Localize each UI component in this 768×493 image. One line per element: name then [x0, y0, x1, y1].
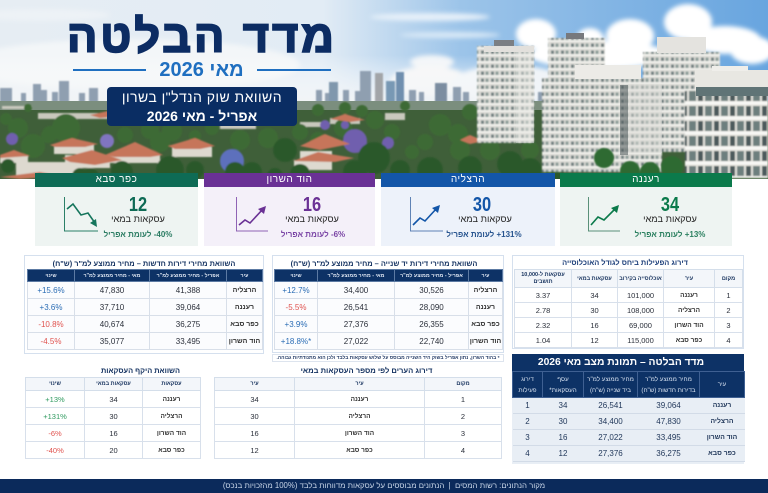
- footnote: * בהוד השרון, נתון אפריל בשוק היד השנייה מבוסס על שלוש עסקאות בלבד ולכן הוא מתנודתיות גבוהה.: [276, 356, 500, 361]
- table: activity per population: 115,000: [627, 336, 654, 344]
- table: new apartment prices: הרצליה: [233, 286, 256, 294]
- tower left: [477, 46, 534, 143]
- tower rear right: [643, 52, 720, 152]
- table: May 2026 summary: 4: [525, 449, 530, 458]
- table: ranking by deals: 30: [250, 412, 259, 420]
- table: May 2026 summary: פעילות: [518, 386, 537, 394]
- table: May 2026 summary: 27,376: [598, 449, 623, 458]
- table: ranking by deals: 16: [250, 428, 259, 438]
- card: Herzliya: [381, 173, 555, 246]
- table: activity per population: 3.37: [536, 290, 550, 300]
- table: activity per population: אוכלוסייה בקירוב: [619, 276, 662, 282]
- table: second-hand apartment prices: +12.7%: [282, 286, 310, 294]
- table: activity per population: 16: [590, 320, 599, 330]
- table: ranking by deals: הרצליה: [348, 412, 371, 420]
- deals label: עסקאות במאי: [643, 214, 697, 224]
- table: activity per population: רעננה: [680, 292, 698, 298]
- table: May 2026 summary: ביד שנייה (ש"ח): [590, 386, 631, 394]
- card: Kfar Saba: [35, 173, 198, 246]
- table: May 2026 summary: 47,830: [656, 417, 681, 426]
- table: ranking by deals: מקום: [456, 381, 470, 387]
- table: new apartment prices: 40,674: [100, 320, 124, 328]
- panel heading: דירוג הערים לפי מספר העסקאות במאי: [301, 366, 432, 375]
- table: second-hand apartment prices: +18.8%*: [281, 336, 311, 346]
- table: deal volume comparison: עסקאות: [161, 381, 182, 387]
- table: deal volume comparison: עסקאות במאי: [96, 381, 131, 387]
- footer: data source: [0, 479, 768, 493]
- table: second-hand apartment prices: 30,526: [419, 286, 444, 294]
- table: May 2026 summary: 34: [559, 401, 567, 410]
- subtitle box: [107, 87, 297, 126]
- table: new apartment prices: +3.6%: [40, 302, 62, 312]
- table: May 2026 summary: דירוג: [521, 376, 534, 382]
- table: May 2026 summary: רעננה: [713, 402, 731, 409]
- table: activity per population: הרצליה: [678, 306, 700, 314]
- table: second-hand apartment prices: 28,090: [419, 302, 444, 312]
- table: activity per population: כפר סבא: [676, 336, 702, 344]
- table: ranking by deals: רעננה: [351, 396, 368, 402]
- table: new apartment prices: כפר סבא: [230, 320, 259, 328]
- card: Hod Hasharon: [204, 173, 375, 246]
- table: new apartment prices: עיר: [241, 272, 248, 278]
- panel: deal volume comparison: [25, 366, 201, 459]
- table: May 2026 summary: הרצליה: [710, 418, 734, 425]
- panel heading: מדד הבלטה – תמונת מצב מאי 2026: [538, 357, 704, 368]
- table: activity per population: מקום: [722, 276, 735, 282]
- table: second-hand apartment prices: 22,740: [419, 336, 444, 346]
- panel: new apartment prices: [24, 255, 264, 354]
- table: ranking by deals: כפר סבא: [346, 446, 373, 454]
- card heading: רעננה: [632, 174, 660, 185]
- table: second-hand apartment prices: 34,400: [344, 286, 368, 294]
- hero photo: city skyline and residential towers: [0, 0, 768, 179]
- table: deal volume comparison: 20: [109, 446, 118, 454]
- panel heading: השוואת היקף העסקאות: [101, 366, 180, 375]
- table: ranking by deals: 2: [461, 412, 465, 420]
- icon: falling chart: [64, 197, 98, 232]
- table: activity per population: 69,000: [629, 320, 652, 330]
- table: deal volume comparison: [25, 377, 201, 459]
- table: ranking by deals: 1: [461, 394, 465, 404]
- icon: rising chart: [410, 197, 443, 232]
- table: second-hand apartment prices: 27,022: [344, 336, 368, 346]
- deals number: 30: [473, 194, 491, 216]
- houses: [0, 145, 332, 175]
- table: ranking by deals: עיר: [250, 381, 259, 387]
- title: מדד הבלטה: [67, 11, 337, 62]
- change versus April: -40% לעומת אפריל: [104, 230, 172, 239]
- table: activity per population: 2.32: [536, 320, 550, 330]
- table: May 2026 summary: 26,541: [598, 401, 623, 410]
- table: new apartment prices: שינוי: [45, 272, 57, 278]
- table: second-hand apartment prices: מאי - מחיר ממוצע למ"ר: [327, 272, 385, 278]
- table: new apartment prices: +15.6%: [37, 286, 65, 294]
- table: May 2026 summary: מחיר ממוצע למ"ר: [645, 376, 692, 382]
- table: activity per population: 12: [590, 336, 599, 344]
- card heading: הרצליה: [451, 174, 485, 185]
- table: May 2026 summary: הוד השרון: [707, 434, 737, 441]
- table: deal volume comparison: הוד השרון: [157, 430, 186, 436]
- table: deal volume comparison: +131%: [43, 412, 67, 420]
- table: second-hand apartment prices: [274, 269, 503, 350]
- table: activity per population: 101,000: [627, 290, 654, 300]
- tower right foreground: [685, 90, 768, 178]
- table: May 2026 summary: כפר סבא: [708, 450, 736, 457]
- table: new apartment prices: 39,064: [176, 302, 200, 312]
- table: activity per population: 2: [726, 306, 731, 314]
- table: new apartment prices: 33,495: [176, 336, 200, 346]
- table: second-hand apartment prices: 26,355: [419, 320, 444, 328]
- table: May 2026 summary: 34,400: [598, 417, 623, 426]
- table: ranking by deals: הוד השרון: [345, 430, 374, 436]
- panel: ranking by deals: [214, 366, 502, 459]
- table: May 2026 summary: 27,022: [598, 433, 623, 442]
- table: new apartment prices: 47,830: [100, 286, 124, 294]
- panel: activity per population: [512, 255, 744, 349]
- table: ranking by deals: 4: [461, 446, 465, 454]
- subtitle box: אפריל - מאי 2026: [147, 108, 257, 124]
- table: activity per population: [514, 269, 743, 348]
- panel heading: [512, 354, 744, 371]
- table: May 2026 summary: 3: [525, 433, 530, 442]
- table: deal volume comparison: הרצליה: [160, 412, 183, 420]
- table: second-hand apartment prices: הרצליה: [474, 286, 497, 294]
- table: new apartment prices: 37,710: [100, 302, 124, 312]
- deals label: עסקאות במאי: [458, 214, 512, 224]
- table: second-hand apartment prices: כפר סבא: [471, 320, 500, 328]
- table: May 2026 summary: 12: [559, 449, 567, 458]
- table: activity per population: 34: [590, 290, 599, 300]
- table: May 2026 summary: [512, 371, 745, 462]
- table: second-hand apartment prices: הוד השרון: [470, 338, 501, 344]
- table: May 2026 summary: מחיר ממוצע למ"ר: [587, 376, 634, 382]
- table: activity per population: 1.04: [536, 336, 550, 344]
- footer: data source: מקור הנתונים: רשות המסים | הנתונים מבוססים על עסקאות מדווחות בלבד (100% מהזכויות בנכס): [223, 481, 545, 490]
- table: activity per population: 30: [590, 306, 599, 314]
- ground neighbourhood: [0, 101, 768, 179]
- card heading: [381, 173, 555, 186]
- table: activity per population: 1: [726, 290, 731, 300]
- table: deal volume comparison: שינוי: [49, 381, 61, 387]
- table: May 2026 summary: בדירות חדשות (ש"ח): [641, 386, 696, 394]
- subtitle: month and year with rules: מאי 2026: [159, 59, 244, 81]
- table: activity per population: עסקאות במאי: [577, 276, 612, 282]
- table: May 2026 summary: 33,495: [656, 433, 681, 442]
- table: ranking by deals: עיר: [355, 381, 364, 387]
- table: new apartment prices: 41,388: [176, 286, 200, 294]
- deals number: 12: [129, 194, 147, 216]
- table: second-hand apartment prices: -5.5%: [286, 302, 306, 312]
- panel heading: דירוג הפעילות ביחס לגודל האוכלוסייה: [562, 258, 688, 267]
- subtitle box: השוואת שוק הנדל"ן בשרון: [122, 88, 282, 104]
- table: activity per population: 2.78: [536, 306, 550, 314]
- deals label: עסקאות במאי: [285, 214, 339, 224]
- table: May 2026 summary: 36,275: [656, 449, 681, 458]
- table: ranking by deals: [214, 377, 502, 459]
- card heading: כפר סבא: [96, 174, 137, 185]
- table: deal volume comparison: -6%: [48, 428, 62, 438]
- footnote: [272, 354, 504, 362]
- table: May 2026 summary: 16: [559, 433, 567, 442]
- table: new apartment prices: רעננה: [235, 304, 254, 310]
- table: new apartment prices: הוד השרון: [229, 338, 260, 344]
- table: new apartment prices: [27, 269, 263, 350]
- icon: rising chart: [236, 197, 268, 232]
- table: second-hand apartment prices: עיר: [482, 272, 489, 278]
- table: second-hand apartment prices: רעננה: [476, 304, 495, 310]
- table: second-hand apartment prices: 27,376: [344, 320, 368, 328]
- table: activity per population: הוד השרון: [674, 322, 704, 328]
- deals number: 16: [303, 194, 321, 216]
- change versus April: +13% לעומת אפריל: [635, 230, 705, 239]
- table: May 2026 summary: 30: [559, 417, 567, 426]
- table: new apartment prices: 36,275: [176, 320, 200, 328]
- table: May 2026 summary: 39,064: [656, 401, 681, 410]
- table: new apartment prices: -4.5%: [41, 336, 61, 346]
- table: second-hand apartment prices: שינוי: [290, 272, 302, 278]
- panel heading: השוואת מחירי דירות יד שנייה – מחיר ממוצע למ"ר (ש"ח): [291, 259, 477, 268]
- table: activity per population: 108,000: [627, 306, 654, 314]
- table: activity per population: עיר: [685, 276, 693, 282]
- icon: rising chart: [588, 197, 620, 232]
- table: May 2026 summary: עסף: [557, 376, 569, 382]
- table: deal volume comparison: 30: [109, 412, 118, 420]
- table: new apartment prices: -10.8%: [38, 320, 64, 328]
- card heading: [35, 173, 198, 186]
- card heading: [204, 173, 375, 186]
- distant skyline: [0, 71, 546, 102]
- panel heading: השוואת מחירי דירות חדשות – מחיר ממוצע למ"ר (ש"ח): [53, 259, 235, 268]
- table: ranking by deals: 12: [250, 446, 259, 454]
- panel: May 2026 summary: [512, 354, 744, 464]
- table: second-hand apartment prices: +3.9%: [285, 320, 307, 328]
- deals label: עסקאות במאי: [111, 214, 165, 224]
- panel: second-hand apartment prices: [272, 255, 504, 353]
- table: second-hand apartment prices: אפריל - מחיר ממוצע למ"ר: [400, 272, 463, 278]
- table: new apartment prices: אפריל - מחיר ממוצע למ"ר: [157, 272, 219, 278]
- card heading: הוד השרון: [267, 174, 312, 185]
- table: second-hand apartment prices: 26,541: [344, 302, 368, 312]
- tower front centre: [542, 78, 662, 172]
- card heading: [560, 173, 732, 186]
- table: May 2026 summary: עיר: [718, 381, 726, 388]
- table: deal volume comparison: רעננה: [163, 396, 180, 402]
- table: ranking by deals: 3: [461, 428, 465, 438]
- table: deal volume comparison: +13%: [45, 394, 65, 404]
- table: new apartment prices: 35,077: [100, 336, 124, 346]
- change versus April: -6% לעומת אפריל: [281, 230, 345, 239]
- table: new apartment prices: מאי - מחיר ממוצע למ"ר: [83, 272, 141, 278]
- table: ranking by deals: 34: [250, 394, 259, 404]
- deals number: 34: [661, 194, 679, 216]
- tower rear centre: [548, 38, 605, 98]
- table: May 2026 summary: 2: [525, 417, 530, 426]
- table: May 2026 summary: 1: [525, 401, 530, 410]
- change versus April: +131% לעומת אפריל: [446, 230, 522, 239]
- table: activity per population: עסקאות ל-10,000 תושבים: [521, 272, 565, 284]
- table: activity per population: 3: [726, 320, 731, 330]
- table: activity per population: 4: [726, 336, 731, 344]
- table: deal volume comparison: 16: [109, 428, 118, 438]
- table: May 2026 summary: העסקאות*: [549, 386, 577, 394]
- card: Raanana: [560, 173, 732, 246]
- table: deal volume comparison: -40%: [46, 446, 64, 454]
- table: deal volume comparison: כפר סבא: [158, 446, 185, 454]
- table: deal volume comparison: 34: [109, 394, 118, 404]
